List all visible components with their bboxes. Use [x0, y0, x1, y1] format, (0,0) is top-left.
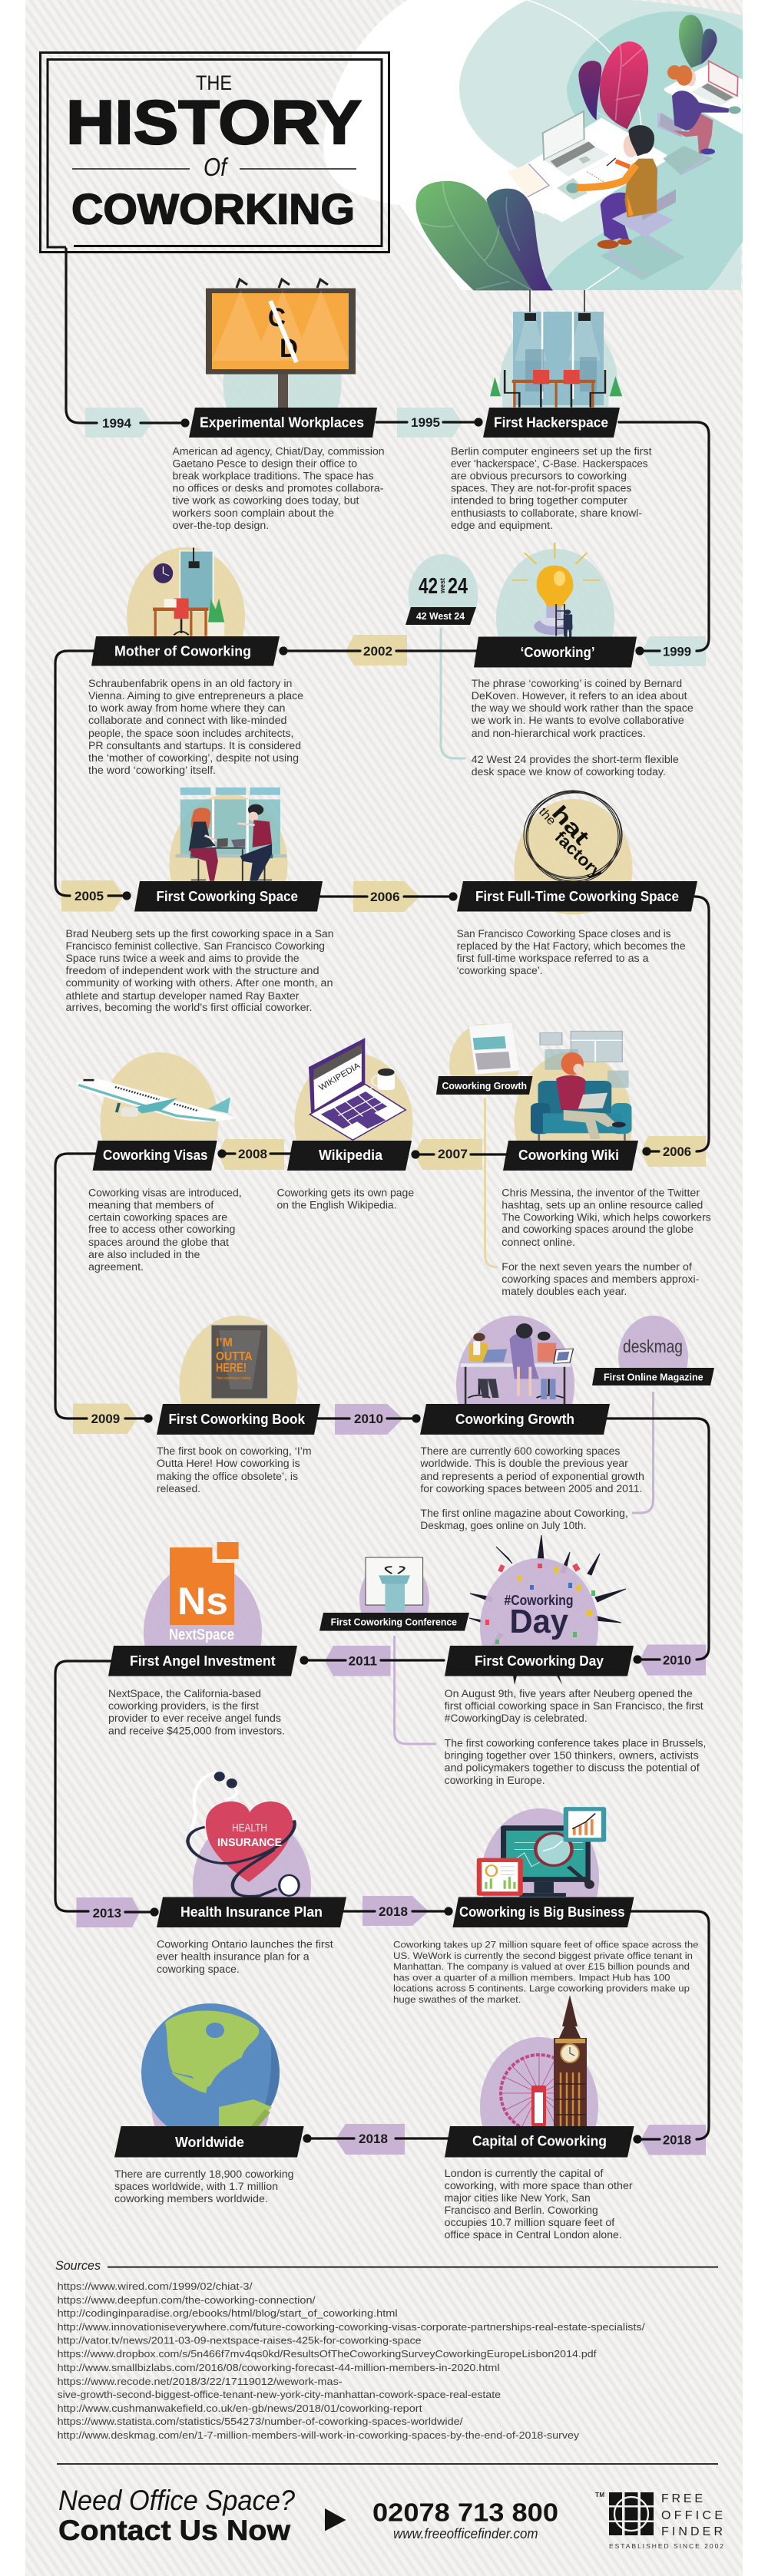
year tag: 2011 — [349, 1655, 377, 1669]
year tag — [641, 2125, 706, 2155]
icon: monitor with charts and magnifier — [477, 1807, 606, 1907]
text block: first official coworking space in San Francisco, the first — [445, 1700, 703, 1712]
heading bar: Coworking Wiki — [518, 1148, 619, 1163]
year tag — [218, 1139, 284, 1170]
heading bar — [503, 1141, 638, 1171]
text block: Brad Neuberg sets up the first coworking space in a San — [66, 928, 333, 940]
icon: the hat factory logo — [515, 782, 633, 915]
heading bar: Worldwide — [175, 2135, 244, 2150]
heading bar: First Hackerspace — [494, 414, 608, 430]
text block: and receive $425,000 from investors. — [108, 1726, 285, 1736]
heading bar: Coworking Growth — [455, 1412, 574, 1427]
text block: Coworking visas are introduced, — [88, 1187, 242, 1199]
icon: person on armchair with documents — [449, 1022, 633, 1150]
callout: First Online Magazine: The first online magazine about Coworking, — [420, 1508, 628, 1519]
heading bar: First Coworking Book — [169, 1412, 306, 1427]
year tag — [335, 1404, 403, 1435]
footer call to action — [58, 2485, 295, 2546]
text block — [88, 678, 303, 776]
sources list: http://www.innovationiseverywhere.com/future-coworking-coworking-visas-corporate-partnerships-real-estate-specialists/ — [58, 2321, 645, 2333]
sources list: http://www.cushmanwakefield.co.uk/en-gb/news/2018/01/coworking-report — [58, 2403, 422, 2414]
panel: 2006 Coworking Wiki — [436, 1022, 711, 1297]
heading bar — [108, 1646, 297, 1676]
logo: Free Office Finder: TM — [595, 2492, 604, 2498]
icon: coworking day burst: #Coworking — [504, 1593, 573, 1608]
text block: hashtag, sets up an online resource called — [502, 1200, 703, 1211]
panel: 2006 First Full-Time Coworking Space — [353, 782, 697, 976]
text block: enthusiasts to collaborate, share knowl- — [451, 507, 642, 519]
text block: PR consultants and startups. It is considered — [88, 740, 301, 751]
icon: coworking day burst — [469, 1535, 626, 1685]
text block: Francisco and Berlin. Coworking — [445, 2204, 598, 2216]
text block: agreement. — [88, 1261, 144, 1273]
panel: 2008 Coworking Visas — [76, 1052, 284, 1273]
text block: meaning that members of — [88, 1200, 214, 1211]
text block: for coworking spaces between 2005 and 2011. — [420, 1483, 642, 1494]
icon: book cover — [180, 1316, 298, 1414]
callout: First Coworking Conference — [319, 1557, 706, 1786]
sources list: https://www.deepfun.com/the-coworking-connection/ — [58, 2294, 316, 2306]
panel: 2002 Mother of Coworking — [88, 547, 407, 776]
heading bar — [287, 1141, 412, 1171]
panel: 2007 Wikipedia — [276, 1038, 482, 1211]
text block: on the English Wikipedia. — [276, 1200, 396, 1211]
arrow — [325, 2508, 346, 2531]
callout: First Online Magazine: Deskmag, goes online on July 10th. — [420, 1520, 586, 1531]
callout: Coworking Growth — [436, 1076, 699, 1297]
text block — [88, 1187, 242, 1273]
heading bar — [157, 1404, 320, 1435]
heading bar — [457, 881, 697, 912]
logo: Free Office Finder: ESTABLISHED SINCE 2002 — [609, 2542, 723, 2550]
sources list: https://www.statista.com/statistics/554273/number-of-coworking-spaces-worldwide/ — [58, 2416, 463, 2427]
text block: the way we should work rather than the space — [472, 702, 694, 714]
callout: 42 West 24: 42 West 24 provides the short-term flexible — [472, 754, 679, 765]
text block: locations across 5 continents. Large coworking providers make up — [393, 1983, 690, 1994]
callout: First Coworking Conference: coworking in Europe. — [445, 1775, 545, 1786]
title block — [40, 52, 389, 252]
text block: free to access other coworking — [88, 1224, 235, 1235]
icon: NextSpace logo: Ns — [177, 1580, 228, 1623]
icon: meeting room — [488, 290, 622, 413]
title block: COWORKING — [71, 184, 355, 233]
text block: freedom of independent work with the structure and — [66, 965, 319, 976]
text block: ever ‘hackerspace’, C-Base. Hackerspaces — [451, 457, 648, 470]
text block: connect online. — [502, 1237, 575, 1248]
text block: NextSpace, the California-based — [108, 1688, 261, 1699]
text block: workers soon complain about the — [171, 507, 334, 519]
text block: the ‘mother of coworking’, despite not using — [88, 752, 299, 764]
sources heading: Sources — [55, 2258, 101, 2273]
text block: community of working with others. After one month, an — [66, 977, 333, 989]
heading bar: Wikipedia — [319, 1148, 383, 1163]
text block: major cities like New York, San — [445, 2192, 591, 2204]
heading bar: First Coworking Day — [475, 1653, 604, 1669]
text block: making the office obsolete’, is — [157, 1471, 298, 1482]
text block — [502, 1187, 711, 1248]
text block: American ad agency, Chiat/Day, commission — [172, 445, 384, 457]
callout: 42 West 24 — [406, 554, 679, 778]
year tag — [77, 1897, 140, 1927]
callout: First Coworking Conference: and policymakers together to discuss the potential of — [445, 1762, 700, 1774]
text block: spaces around the globe that — [88, 1237, 229, 1248]
sources list: http://www.smallbizlabs.com/2016/08/coworking-forecast-44-million-members-in-2020.html — [58, 2362, 500, 2373]
year tag — [641, 1136, 706, 1167]
footer call to action: Need Office Space? — [58, 2485, 295, 2516]
text block — [276, 1187, 414, 1211]
title block: THE — [196, 71, 232, 94]
callout: Coworking Growth: Coworking Growth — [442, 1080, 527, 1091]
year tag: 1999 — [663, 645, 691, 659]
text block: to work away from home where they can — [88, 702, 286, 714]
heading bar — [445, 2126, 634, 2157]
callout: First Coworking Conference: bringing together over 150 thinkers, owners, activists — [445, 1750, 699, 1762]
year tag — [85, 408, 152, 438]
sources list: http://codinginparadise.org/ebooks/html/blog/start_of_coworking.html — [58, 2307, 398, 2319]
heading bar: First Full-Time Coworking Space — [475, 889, 679, 904]
year tag: 2007 — [438, 1148, 468, 1161]
text block: DeKoven. However, it refers to an idea about — [472, 690, 687, 702]
year tag: 2018 — [379, 1905, 408, 1919]
callout: First Coworking Conference: First Coworking Conference — [331, 1617, 457, 1627]
text block — [171, 445, 384, 531]
contact details: 02078 713 800 — [372, 2498, 558, 2527]
text block: no offices or desks and promotes collabora- — [172, 483, 384, 494]
icon: team around a desk — [456, 1316, 574, 1414]
icon: heart with stethoscope: HEALTH — [232, 1821, 267, 1835]
contact details: www.freeofficefinder.com — [393, 2526, 538, 2541]
sources list: https://www.recode.net/2018/3/22/17119012/wework-mas- — [58, 2376, 343, 2387]
heading bar: Capital of Coworking — [472, 2134, 607, 2149]
text block: are also included in the — [88, 1249, 200, 1260]
callout: Coworking Growth: For the next seven years the number of — [502, 1261, 692, 1273]
text block: Outta Here! How coworking is — [157, 1458, 300, 1469]
year tag: 2008 — [238, 1148, 267, 1161]
callout: Coworking Growth: mately doubles each year. — [502, 1286, 627, 1297]
heading bar — [114, 2126, 304, 2157]
callout: 42 West 24: 24 — [448, 574, 468, 599]
year tag — [397, 408, 462, 438]
panel: 2010 Coworking Growth — [335, 1316, 714, 1531]
heading bar — [189, 408, 377, 438]
text block: On August 9th, five years after Neuberg opened the — [445, 1688, 693, 1699]
icon: book cover: HERE! — [216, 1362, 247, 1375]
panel: 1995 First Hackerspace — [397, 290, 652, 531]
text block: intended to bring together computer — [451, 495, 628, 507]
year tag: 1994 — [102, 417, 132, 431]
icon: airplane — [76, 1052, 234, 1151]
year tag: 2018 — [359, 2132, 388, 2146]
hero illustration: coworkers at desks — [323, 0, 743, 290]
text block: The phrase ‘coworking’ is coined by Bernard — [472, 678, 682, 689]
text block: coworking providers, is the first — [108, 1700, 259, 1712]
text block: replaced by the Hat Factory, which becomes the — [457, 940, 686, 952]
year tag — [61, 880, 124, 912]
text block — [445, 1688, 703, 1724]
heading bar — [157, 1897, 346, 1927]
text block: US. WeWork is currently the second biggest private office tenant in — [393, 1950, 693, 1961]
text block: There are currently 18,900 coworking — [114, 2168, 293, 2180]
heading bar: First Coworking Space — [157, 889, 298, 904]
text block: spaces. They are not-for-profit spaces — [451, 483, 632, 494]
panel: 2005 First Coworking Space — [61, 788, 333, 1013]
text block: Vienna. Aiming to give entrepreneurs a place — [88, 690, 303, 702]
text block — [419, 1445, 644, 1494]
year tag: 2018 — [663, 2134, 691, 2148]
icon: book cover: I’M — [216, 1336, 233, 1349]
text block: Schraubenfabrik opens in an old factory in — [88, 678, 292, 689]
icon: the hat factory logo: hat — [548, 801, 594, 849]
text block: first full-time workspace referred to as a — [457, 953, 649, 964]
title block: HISTORY — [66, 88, 362, 157]
year tag — [642, 636, 706, 666]
text block: Coworking takes up 27 million square feet of office space across the — [393, 1939, 699, 1950]
text block: released. — [157, 1483, 200, 1494]
logo: Free Office Finder — [595, 2492, 723, 2550]
year tag — [325, 1646, 390, 1676]
year tag: 2013 — [93, 1907, 121, 1920]
sources list — [58, 2280, 645, 2441]
text block: the word ‘coworking’ itself. — [88, 765, 216, 776]
callout: First Online Magazine — [420, 1316, 714, 1531]
text block: and non-hierarchical work practices. — [472, 728, 646, 739]
text block: London is currently the capital of — [445, 2168, 604, 2179]
icon: heart with stethoscope — [187, 1772, 311, 1914]
text block: tive work as coworking does today, but — [172, 495, 359, 507]
text block: we work in. He wants to evolve collaborative — [471, 715, 684, 726]
text block: certain coworking spaces are — [88, 1212, 227, 1224]
heading bar — [91, 636, 280, 666]
callout: 42 West 24: desk space we know of coworking today. — [472, 766, 666, 778]
callout: First Online Magazine: deskmag — [623, 1336, 683, 1356]
text block: and represents a period of exponential growth — [420, 1471, 644, 1482]
text block — [157, 1939, 333, 1975]
heading bar — [453, 1897, 634, 1927]
icon: heart with stethoscope: INSURANCE — [217, 1836, 282, 1849]
year tag: 2006 — [663, 1145, 691, 1159]
contact details — [372, 2498, 558, 2541]
callout: First Coworking Conference: The first coworking conference takes place in Brussels, — [445, 1738, 706, 1749]
panel: 2011 First Angel Investment — [108, 1542, 390, 1736]
year tag — [346, 635, 407, 665]
heading bar: Coworking Visas — [103, 1148, 207, 1163]
heading bar — [483, 408, 620, 438]
year tag — [414, 1139, 482, 1170]
icon: billboard — [206, 279, 356, 413]
icon: coworking day burst: Day — [510, 1603, 568, 1640]
text block: edge and equipment. — [451, 520, 553, 531]
panel: 1994 Experimental Workplaces — [85, 279, 384, 531]
year tag — [353, 881, 420, 912]
icon: the hat factory logo: the — [536, 805, 558, 828]
text block: Manhattan. The company is valued at over £15 billion pounds and — [393, 1961, 690, 1972]
heading bar — [474, 637, 637, 668]
panel: 2018 Worldwide — [114, 2003, 405, 2204]
icon: globe — [141, 2003, 280, 2142]
text block — [157, 1445, 312, 1494]
year tag: 2005 — [74, 890, 104, 903]
text block: collaborate and connect with like-minded — [88, 715, 287, 726]
text block: break workplace traditions. The space has — [172, 471, 374, 482]
panel: 1999 Coworking — [406, 543, 706, 778]
icon: NextSpace logo — [144, 1542, 262, 1661]
year tag: 1995 — [411, 416, 440, 430]
panel: 2018 Coworking is Big Business — [362, 1807, 699, 2005]
logo: Free Office Finder: FINDER — [661, 2525, 723, 2538]
icon: Big Ben, London Eye and phone box — [480, 1995, 598, 2135]
text block — [451, 445, 652, 531]
text block: arrives, becoming the world’s first official coworker. — [66, 1002, 312, 1013]
text block: has over a quarter of a million members. Impact Hub has 100 — [393, 1973, 670, 1983]
text block: Gaetano Pesce to design their office to — [172, 457, 357, 470]
icon: laptop showing Wikipedia — [295, 1038, 413, 1151]
heading bar: Mother of Coworking — [114, 643, 251, 659]
footer call to action: Contact Us Now — [58, 2515, 290, 2546]
sources list: http://www.deskmag.com/en/1-7-million-members-will-work-in-coworking-spaces-by-the-end-of-2018-survey — [58, 2429, 580, 2441]
year tag — [362, 1896, 429, 1926]
icon: laptop showing Wikipedia: WIKIPEDIA — [317, 1061, 362, 1093]
heading bar: First Angel Investment — [130, 1653, 276, 1669]
text block — [457, 928, 686, 976]
text block: ever health insurance plan for a — [157, 1951, 310, 1963]
callout: Coworking Growth: coworking spaces and members approxi- — [502, 1273, 699, 1285]
text block: over-the-top design. — [172, 520, 269, 531]
sources list: sive-growth-second-biggest-office-tenant-new-york-city-manhattan-cowork-space-real-estate — [58, 2389, 501, 2400]
heading bar — [134, 881, 323, 912]
text block — [66, 928, 333, 1013]
logo: Free Office Finder: FREE — [661, 2492, 703, 2505]
text block: and coworking spaces around the globe — [502, 1224, 694, 1235]
heading bar: Health Insurance Plan — [180, 1904, 323, 1920]
text block: The Coworking Wiki, which helps coworkers — [502, 1212, 711, 1224]
panel: 2009 First Coworking Book — [73, 1316, 320, 1494]
icon: the hat factory logo: factory — [551, 827, 607, 883]
text block: are obvious precursors to coworking — [451, 471, 627, 482]
text block: spaces worldwide, with 1.7 million — [114, 2181, 278, 2192]
text block: coworking space. — [157, 1963, 240, 1975]
callout: First Online Magazine: First Online Magazine — [604, 1371, 703, 1383]
year tag — [336, 2124, 405, 2155]
title block: Of — [204, 153, 229, 181]
year tag: 2010 — [354, 1412, 383, 1426]
panel: 2013 Health Insurance Plan — [77, 1772, 346, 1975]
text block: The first book on coworking, ‘I’m — [157, 1445, 312, 1457]
text block: Coworking gets its own page — [276, 1187, 414, 1199]
year tag: 2009 — [91, 1412, 120, 1426]
sources list: https://www.wired.com/1999/02/chiat-3/ — [58, 2280, 253, 2292]
text block: worldwide. This is double the previous year — [419, 1458, 628, 1469]
text block: provider to ever receive angel funds — [108, 1712, 281, 1724]
text block: Francisco feminist collective. San Francisco Coworking — [66, 940, 325, 952]
callout: 42 West 24: west — [439, 578, 446, 594]
text block — [445, 2168, 633, 2241]
year tag: 2010 — [663, 1653, 691, 1667]
heading bar: ‘Coworking’ — [521, 645, 595, 660]
text block: #CoworkingDay is celebrated. — [445, 1712, 588, 1724]
heading bar — [445, 1646, 634, 1676]
sources list: http://vator.tv/news/2011-03-09-nextspace-raises-425k-for-coworking-space — [58, 2335, 422, 2346]
logo: Free Office Finder: OFFICE — [661, 2509, 723, 2522]
text block: San Francisco Coworking Space closes and is — [457, 928, 671, 940]
text block — [393, 1939, 699, 2005]
callout: 42 West 24: 42 — [419, 574, 438, 599]
callout: 42 West 24: 42 West 24 — [416, 610, 465, 622]
text block: coworking members worldwide. — [114, 2193, 268, 2204]
text block — [114, 2168, 293, 2204]
text block: Chris Messina, the inventor of the Twitter — [502, 1187, 700, 1199]
text block: athlete and startup developer named Ray Baxter — [66, 990, 300, 1002]
heading bar — [93, 1141, 217, 1171]
text block: coworking, with more space than other — [445, 2180, 633, 2191]
text block — [108, 1688, 285, 1736]
text block: office space in Central London alone. — [445, 2229, 622, 2241]
text block — [471, 678, 694, 739]
year tag — [640, 1644, 706, 1676]
panel: 2010 First Coworking Day — [319, 1535, 706, 1786]
sources list: https://www.dropbox.com/s/5n466f7mv4qs0kd/ResultsOfTheCoworkingSurveyCoworkingEuropeLisbon2014.pdf — [58, 2348, 597, 2360]
text block: huge swathes of the market. — [393, 1994, 521, 2005]
icon: lightbulb with ladder — [496, 543, 614, 647]
timeline connector — [55, 249, 709, 2142]
icon: billboard: C — [268, 303, 286, 332]
heading bar: Experimental Workplaces — [200, 414, 364, 430]
icon: book cover: How coworking is making — [217, 1376, 250, 1381]
panel: 2018 Capital of Coworking — [445, 1995, 706, 2241]
text block: Berlin computer engineers set up the first — [451, 445, 652, 457]
text block: Coworking Ontario launches the first — [157, 1939, 333, 1950]
year tag — [73, 1403, 137, 1434]
icon: office with clock — [127, 547, 245, 646]
text block: people, the space soon includes architects, — [88, 728, 293, 739]
heading bar — [420, 1404, 610, 1435]
icon: book cover: OUTTA — [216, 1350, 253, 1363]
icon: two people at a cafe table — [169, 788, 287, 893]
text block: ‘coworking space’. — [457, 965, 543, 976]
heading bar: Coworking is Big Business — [459, 1904, 625, 1920]
year tag: 2006 — [370, 890, 400, 904]
text block: Space runs twice a week and aims to provide the — [66, 953, 300, 964]
year tag: 2002 — [363, 645, 392, 659]
icon: NextSpace logo: NextSpace — [169, 1627, 234, 1643]
icon: billboard: D — [280, 334, 298, 363]
text block: occupies 10.7 million square feet of — [445, 2217, 614, 2228]
text block: There are currently 600 coworking spaces — [420, 1445, 621, 1457]
